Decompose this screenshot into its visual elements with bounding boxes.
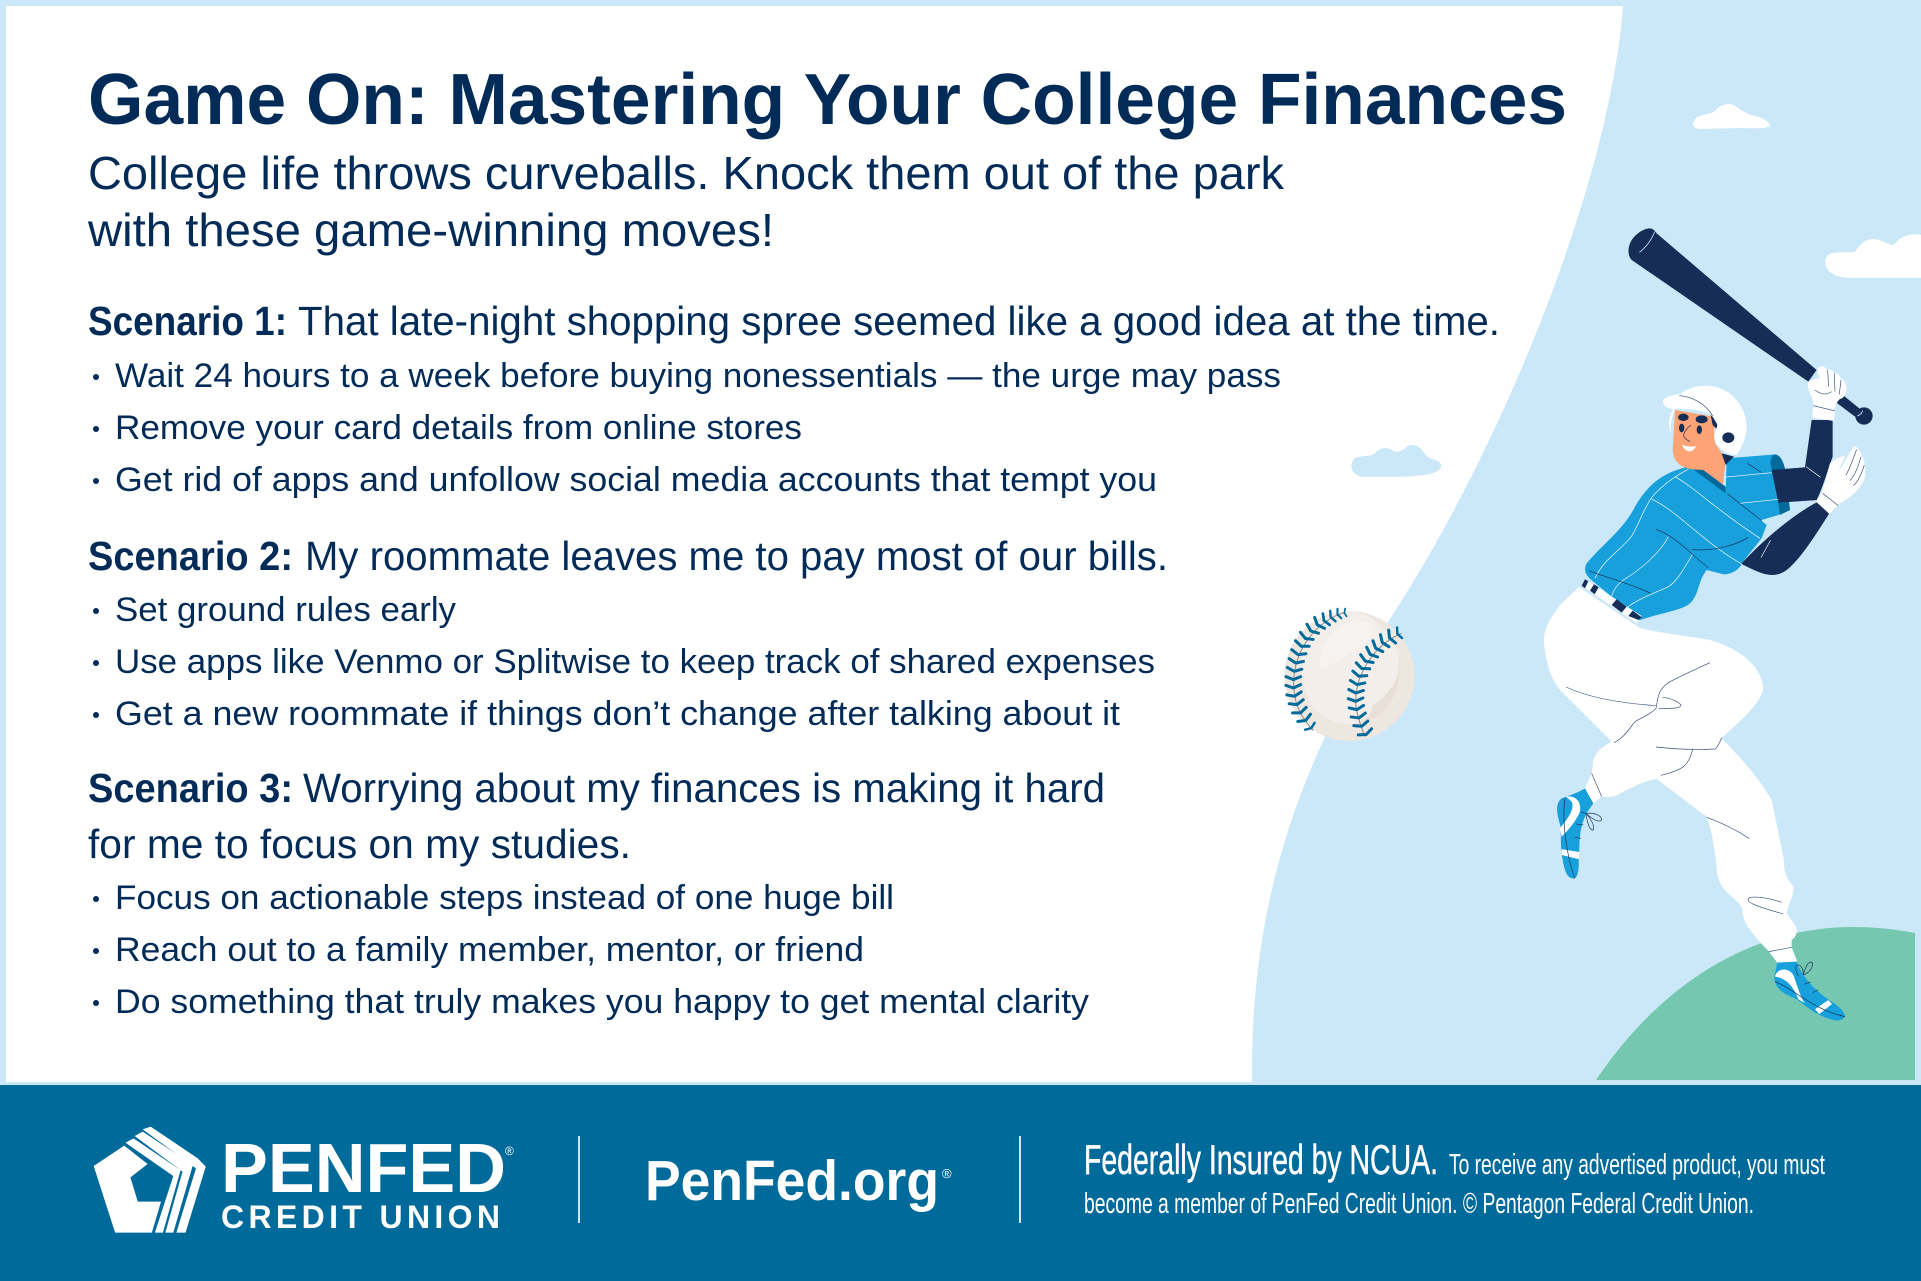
scenario 2 tips: Get a new roommate if things don’t change after talking about it bbox=[115, 695, 1121, 733]
scenario 3 heading: Scenario 3: bbox=[88, 765, 293, 811]
PenFed wordmark: CREDIT UNION bbox=[221, 1199, 500, 1235]
bat and top glove bbox=[1628, 228, 1873, 425]
scenario 2 tips: Set ground rules early bbox=[115, 591, 456, 629]
bat bbox=[1628, 228, 1873, 425]
website: ® bbox=[942, 1166, 952, 1181]
left shoe bbox=[1557, 788, 1602, 879]
pants and legs bbox=[1544, 587, 1845, 1021]
cloud right bbox=[1825, 234, 1921, 278]
facial features bbox=[1678, 414, 1708, 434]
upper body bbox=[1582, 386, 1865, 623]
divider right bbox=[1019, 1136, 1021, 1223]
belt bbox=[1582, 579, 1642, 623]
lower glove bbox=[1816, 446, 1865, 514]
PenFed wordmark: PENFED bbox=[221, 1129, 506, 1207]
scenario 2 tips bbox=[93, 591, 1155, 733]
website: PenFed.org bbox=[645, 1149, 939, 1213]
subtitle: with these game-winning moves! bbox=[87, 204, 774, 256]
scenario 3 tips: Reach out to a family member, mentor, or friend bbox=[115, 931, 864, 969]
footer band bbox=[0, 1085, 1921, 1281]
left seam stitches bbox=[1286, 609, 1347, 732]
scenario 1 tips: Remove your card details from online stores bbox=[115, 409, 802, 447]
title: Game On: Mastering Your College Finances bbox=[88, 60, 1567, 140]
subtitle bbox=[87, 147, 1285, 256]
scenario 1 heading: That late-night shopping spree seemed like a good idea at the time. bbox=[298, 298, 1500, 344]
white content panel with curved edge bbox=[6, 6, 1623, 1082]
batter bbox=[1544, 228, 1873, 1021]
scenario 1 tips bbox=[93, 357, 1281, 499]
scenario 3 block bbox=[88, 765, 1105, 1021]
scenario 1 tips: Wait 24 hours to a week before buying nonessentials — the urge may pass bbox=[115, 357, 1281, 395]
divider left bbox=[578, 1136, 580, 1223]
scenario 3 heading: Worrying about my finances is making it hard bbox=[303, 765, 1105, 811]
cloud middle bbox=[1351, 445, 1441, 477]
scenario 1 tips: Get rid of apps and unfollow social media accounts that tempt you bbox=[115, 461, 1157, 499]
scenario 2 heading: Scenario 2: bbox=[88, 533, 293, 579]
scenario 3 tips: Do something that truly makes you happy to get mental clarity bbox=[115, 983, 1089, 1021]
disclosure: Federally Insured by NCUA. bbox=[1084, 1136, 1438, 1183]
right seam stitches bbox=[1348, 627, 1402, 738]
navy arms bbox=[1772, 420, 1833, 503]
scenario 2 heading: My roommate leaves me to pay most of our bills. bbox=[305, 533, 1168, 579]
right shoe bbox=[1774, 962, 1845, 1021]
jersey bbox=[1585, 467, 1767, 620]
cloud top bbox=[1693, 104, 1770, 129]
scenario 3 tips bbox=[93, 879, 1089, 1021]
scenario 2 tips: Use apps like Venmo or Splitwise to keep track of shared expenses bbox=[115, 643, 1155, 681]
scenario 1 heading: Scenario 1: bbox=[88, 298, 287, 344]
subtitle: College life throws curveballs. Knock them out of the park bbox=[88, 147, 1285, 199]
scenario 1 block bbox=[88, 298, 1500, 499]
scenario 3 tips: Focus on actionable steps instead of one huge bill bbox=[115, 879, 894, 917]
helmet bbox=[1663, 386, 1747, 455]
PenFed logo mark bbox=[94, 1127, 206, 1233]
neck, collar and face bbox=[1673, 410, 1726, 484]
glove bbox=[1808, 366, 1847, 421]
sleeve bbox=[1726, 454, 1790, 520]
green hill bbox=[1596, 927, 1915, 1080]
scenario 2 block bbox=[88, 533, 1168, 733]
baseball bbox=[1284, 609, 1414, 741]
scenario 3 heading: for me to focus on my studies. bbox=[88, 821, 631, 867]
scenario 3 heading bbox=[88, 765, 1105, 867]
PenFed wordmark: ® bbox=[505, 1144, 514, 1158]
disclosure bbox=[1084, 1136, 1825, 1220]
